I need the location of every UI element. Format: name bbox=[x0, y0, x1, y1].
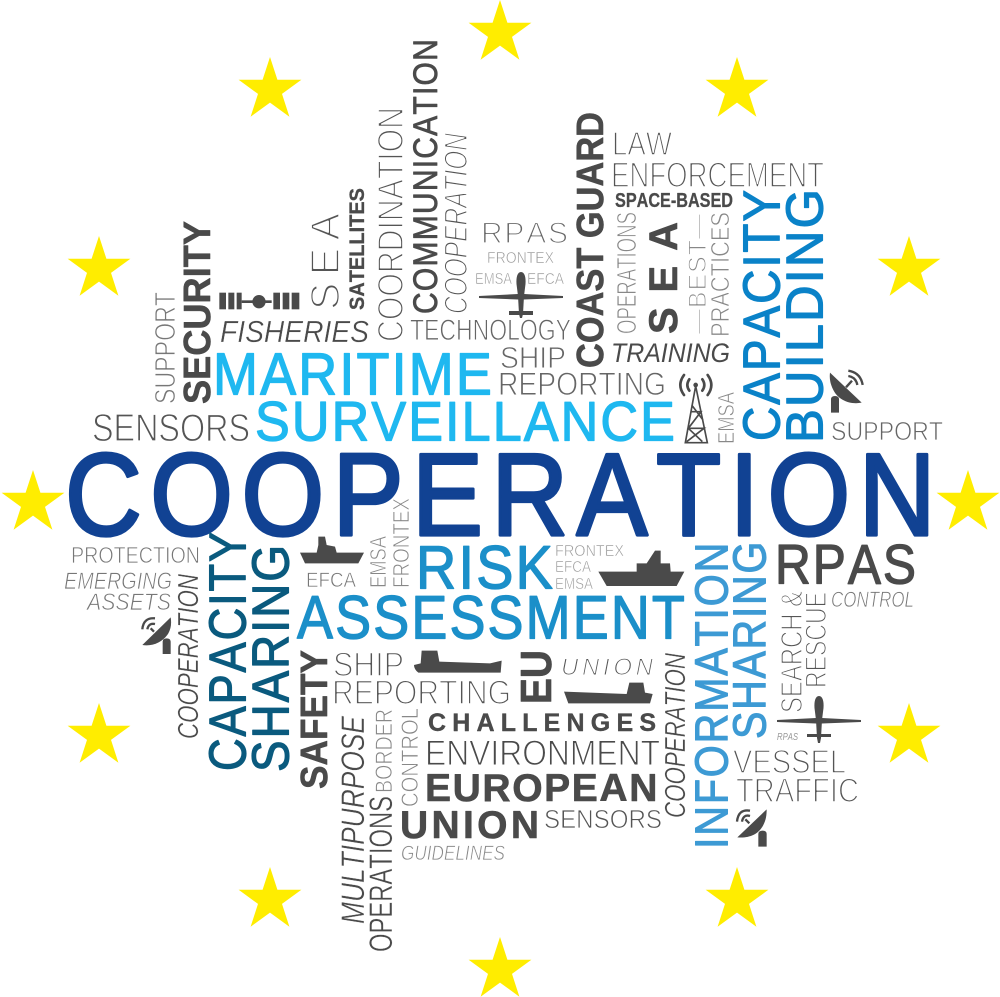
word: CAPACITY vertical blue: CAPACITY bbox=[734, 188, 792, 441]
star: right bbox=[937, 470, 999, 530]
word: RISK: RISK bbox=[416, 534, 555, 602]
word: EMSA vertical left: EMSA bbox=[365, 535, 391, 588]
word: EFCA small: EFCA bbox=[527, 271, 565, 288]
word: BEST vertical: —BEST— bbox=[684, 214, 712, 334]
word: EMERGING: EMERGING bbox=[64, 568, 172, 595]
word: ASSESSMENT: ASSESSMENT bbox=[297, 584, 687, 652]
star: bottom bbox=[469, 937, 531, 997]
word: SHIP upper: SHIP bbox=[500, 340, 566, 375]
word: SHIP lower: SHIP bbox=[333, 646, 404, 684]
word: OPERATIONS vertical: OPERATIONS bbox=[611, 212, 642, 334]
word: GUIDELINES: GUIDELINES bbox=[401, 842, 505, 865]
word: RESCUE vertical: RESCUE bbox=[800, 592, 833, 688]
word: SENSORS: SENSORS bbox=[92, 407, 250, 450]
star: right lower bbox=[878, 703, 940, 763]
word: SUPPORT right: SUPPORT bbox=[831, 416, 943, 446]
icon: satellite dish upper right bbox=[830, 371, 863, 413]
word: COAST GUARD vertical: COAST GUARD bbox=[570, 112, 612, 368]
word: SENSORS lower: SENSORS bbox=[544, 804, 662, 834]
word: LAW: LAW bbox=[612, 125, 673, 162]
star: upper right bbox=[706, 57, 768, 117]
word: UNION italic: UNION bbox=[561, 654, 654, 681]
word: EUROPEAN: EUROPEAN bbox=[425, 767, 659, 810]
word: CAPACITY vertical teal: CAPACITY bbox=[200, 530, 258, 771]
word: OPERATIONS vertical lower: OPERATIONS bbox=[363, 796, 399, 952]
word: FRONTEX vertical: FRONTEX bbox=[388, 498, 414, 588]
icon: drone top bbox=[479, 272, 563, 318]
star: lower right bbox=[706, 867, 768, 927]
word: FISHERIES: FISHERIES bbox=[220, 314, 369, 349]
word: CONTROL italic: CONTROL bbox=[831, 587, 914, 612]
icon: satellite dish left bbox=[142, 617, 171, 654]
icon: frigate ship right bbox=[598, 551, 684, 586]
star: lower left bbox=[239, 867, 301, 927]
word: BUILDING vertical blue: BUILDING bbox=[776, 187, 834, 443]
star: left upper bbox=[68, 236, 130, 296]
icon: tanker ship right bbox=[564, 683, 653, 703]
word: RPAS small: RPAS bbox=[481, 217, 568, 250]
word: CHALLENGES: CHALLENGES bbox=[428, 709, 656, 737]
word: ENFORCEMENT: ENFORCEMENT bbox=[611, 156, 824, 195]
star: left bbox=[2, 470, 64, 530]
word: RPAS large: RPAS bbox=[775, 532, 918, 596]
word: SATELLITES vertical: SATELLITES bbox=[346, 188, 369, 310]
star: right upper bbox=[878, 236, 940, 296]
word: FRONTEX small: FRONTEX bbox=[487, 250, 554, 267]
word: SEARCH & vertical: SEARCH & bbox=[774, 591, 809, 713]
word: COOPERATION vertical italic: COOPERATION bbox=[438, 132, 474, 314]
icon: satellite dish bottom bbox=[737, 809, 767, 847]
word: COOPERATION vertical center: COOPERATION bbox=[660, 653, 692, 818]
word: SAFETY vertical: SAFETY bbox=[294, 650, 336, 789]
word: SHARING vertical teal: SHARING bbox=[242, 543, 300, 772]
word: PROTECTION: PROTECTION bbox=[71, 542, 200, 568]
word: TRAINING: TRAINING bbox=[611, 338, 730, 368]
word: BORDER vertical: BORDER bbox=[371, 709, 398, 793]
word: SECURITY vertical: SECURITY bbox=[177, 221, 219, 404]
word: ASSETS: ASSETS bbox=[85, 589, 171, 616]
word: SURVEILLANCE: SURVEILLANCE bbox=[255, 390, 677, 452]
word: S E A vertical bold: SEA bbox=[642, 222, 686, 334]
word: REPORTING upper: REPORTING bbox=[498, 366, 666, 402]
word: VESSEL: VESSEL bbox=[733, 743, 846, 780]
word: REPORTING lower: REPORTING bbox=[332, 674, 511, 712]
word: TECHNOLOGY: TECHNOLOGY bbox=[410, 314, 571, 347]
word: INFORMATION vertical: INFORMATION bbox=[686, 541, 738, 849]
word: TRAFFIC: TRAFFIC bbox=[736, 772, 859, 810]
word: PRACTICES vertical: PRACTICES bbox=[705, 212, 735, 337]
icon: frigate ship left bbox=[300, 537, 364, 563]
word: MULTIPURPOSE vertical: MULTIPURPOSE bbox=[335, 715, 371, 924]
word: EFCA right: EFCA bbox=[555, 559, 591, 576]
word: EMSA small: EMSA bbox=[475, 271, 513, 288]
word: S E A vertical light: SEA bbox=[302, 212, 348, 310]
word: EMSA right: EMSA bbox=[555, 576, 593, 593]
star: upper left bbox=[239, 57, 301, 117]
icon: satellite bbox=[219, 293, 299, 309]
word: SHARING vertical right: SHARING bbox=[724, 540, 776, 739]
word: COMMUNICATION vertical: COMMUNICATION bbox=[407, 38, 445, 314]
word: SPACE-BASED: SPACE-BASED bbox=[615, 190, 733, 212]
word: MARITIME: MARITIME bbox=[213, 342, 494, 408]
word: ENVIRONMENT: ENVIRONMENT bbox=[425, 734, 660, 773]
word: COOPERATION vertical left: COOPERATION bbox=[173, 574, 205, 739]
icon: tanker ship left bbox=[414, 651, 502, 673]
word: SUPPORT vertical: SUPPORT bbox=[150, 292, 182, 404]
star: left lower bbox=[68, 703, 130, 763]
word: FRONTEX right: FRONTEX bbox=[555, 543, 624, 560]
word: RPAS tiny: RPAS bbox=[777, 732, 798, 743]
word: EFCA left: EFCA bbox=[306, 569, 356, 592]
star: top bbox=[469, 0, 531, 60]
word: CONTROL vertical: CONTROL bbox=[397, 708, 424, 807]
icon: radio tower bbox=[680, 375, 711, 443]
word: EMSA vertical: EMSA bbox=[713, 391, 739, 444]
word: UNION bold: UNION bbox=[400, 804, 539, 847]
word: COORDINATION vertical: COORDINATION bbox=[370, 107, 411, 342]
word: EU vertical: EU bbox=[512, 650, 561, 704]
icon: drone right bbox=[777, 696, 861, 743]
